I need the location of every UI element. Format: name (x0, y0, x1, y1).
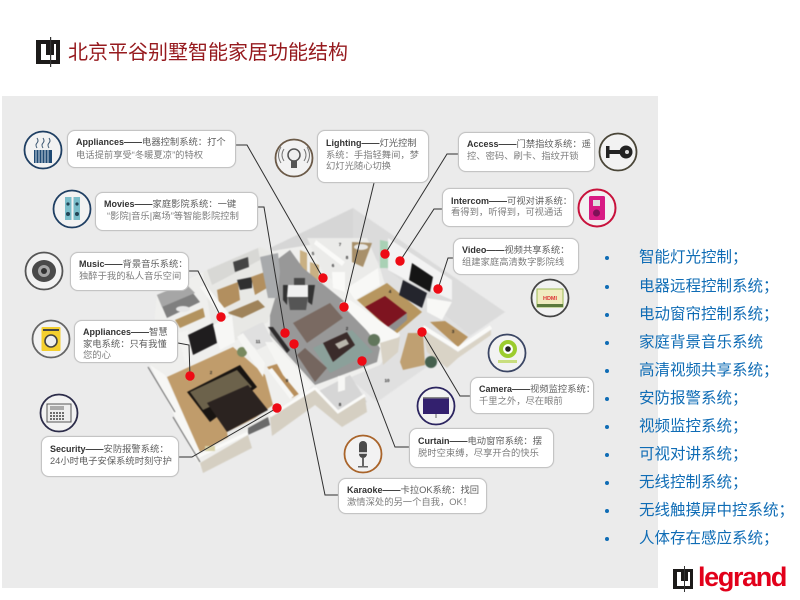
callout: curtain: Curtain——电动窗帘系统：摆 (418, 436, 542, 446)
callout: intercom: Intercom——可视对讲系统： (451, 196, 572, 206)
floor plan illustration: 4 (389, 289, 392, 294)
feature list: 视频监控系统； (639, 418, 748, 435)
callout: music: Music——背景音乐系统： (79, 259, 188, 269)
callout: movies (95, 192, 258, 231)
callout: curtain (409, 428, 554, 468)
floor plan illustration: 8 (339, 402, 342, 407)
callout: karaoke: Karaoke——卡拉OK系统：找回 (347, 485, 479, 495)
icon: HDMI: HDMI (543, 296, 557, 302)
callout: camera: Camera——视频监控系统： (479, 384, 595, 394)
floor plan illustration: 3 (452, 329, 455, 334)
feature list: 可视对讲系统； (639, 446, 748, 463)
callout: music (70, 252, 189, 291)
callout: security: 24小时电子安保系统时刻守护 (50, 456, 172, 466)
legrand wordmark: legrand (698, 562, 786, 592)
callout: camera: 千里之外，尽在眼前 (479, 396, 563, 406)
floor plan illustration: 11 (256, 339, 261, 344)
feature list: 无线触摸屏中控系统； (639, 502, 794, 519)
floor plan illustration: 6 (332, 263, 335, 268)
callout: access: 控、密码、刷卡、指纹开锁 (467, 151, 579, 161)
floor plan illustration: 8 (346, 255, 349, 260)
callout: appliances: Appliances——电器控制系统：打个 (76, 137, 226, 147)
callout: movies: Movies——家庭影院系统：一键 (104, 199, 236, 209)
callout: access: Access——门禁指纹系统：遥 (467, 139, 591, 149)
feature list: 家庭背景音乐系统 (639, 334, 763, 351)
callout: intercom (442, 188, 574, 227)
callout: lighting: Lighting——灯光控制 (326, 138, 417, 148)
callout: camera (470, 377, 594, 414)
callout: video: 组建家庭高清数字影院线 (462, 257, 564, 267)
callout: curtain: 脱时空束缚，尽享开合的快乐 (418, 448, 539, 458)
callout: music: 独醉于我的私人音乐空间 (79, 271, 181, 281)
feature list (605, 248, 794, 547)
callout: lighting: 幻灯光随心切换 (326, 161, 391, 171)
callout: security (41, 436, 179, 477)
floor plan illustration: 9 (286, 378, 289, 383)
floor plan illustration: 7 (339, 242, 342, 247)
feature list: 安防报警系统； (639, 390, 748, 407)
feature list: 电器远程控制系统； (639, 278, 779, 295)
feature list: 智能灯光控制； (639, 249, 748, 266)
feature list: 无线控制系统； (639, 474, 748, 491)
callout: smart appliances: 家电系统：只有我懂 (83, 339, 167, 349)
callout: smart appliances: 您的心 (83, 350, 111, 360)
callout: karaoke (338, 478, 487, 514)
floor plan illustration: 5 (312, 251, 315, 256)
title: 北京平谷别墅智能家居功能结构 (68, 42, 348, 64)
callout: appliances (67, 130, 236, 168)
panel: floor plan background (2, 96, 658, 588)
callout: appliances: 电话提前享受“冬暖夏凉”的特权 (76, 150, 203, 160)
callout: smart appliances (74, 320, 178, 363)
callout: video: Video——视频共享系统： (462, 245, 569, 255)
callout: movies: “影院|音乐|离场”等智能影院控制 (107, 211, 239, 221)
callout: lighting (317, 130, 429, 183)
floor plan illustration: 2 (346, 326, 349, 331)
callout: security: Security——安防报警系统： (50, 444, 169, 454)
floor plan illustration: 2 (210, 370, 213, 375)
callout: lighting: 系统：手指轻舞间，梦 (326, 150, 419, 160)
feature list: 高清视频共享系统； (639, 362, 779, 379)
callout: intercom: 看得到，听得到，可视通话 (451, 207, 563, 217)
callout: karaoke: 激情深处的另一个自我，OK！ (347, 497, 472, 507)
callout: video (453, 238, 579, 275)
callout: smart appliances: Appliances——智慧 (83, 327, 168, 337)
feature list: 电动窗帘控制系统； (639, 306, 779, 323)
floor plan illustration: 10 (384, 378, 390, 383)
feature list: 人体存在感应系统； (639, 530, 779, 547)
callout: access (458, 132, 595, 172)
